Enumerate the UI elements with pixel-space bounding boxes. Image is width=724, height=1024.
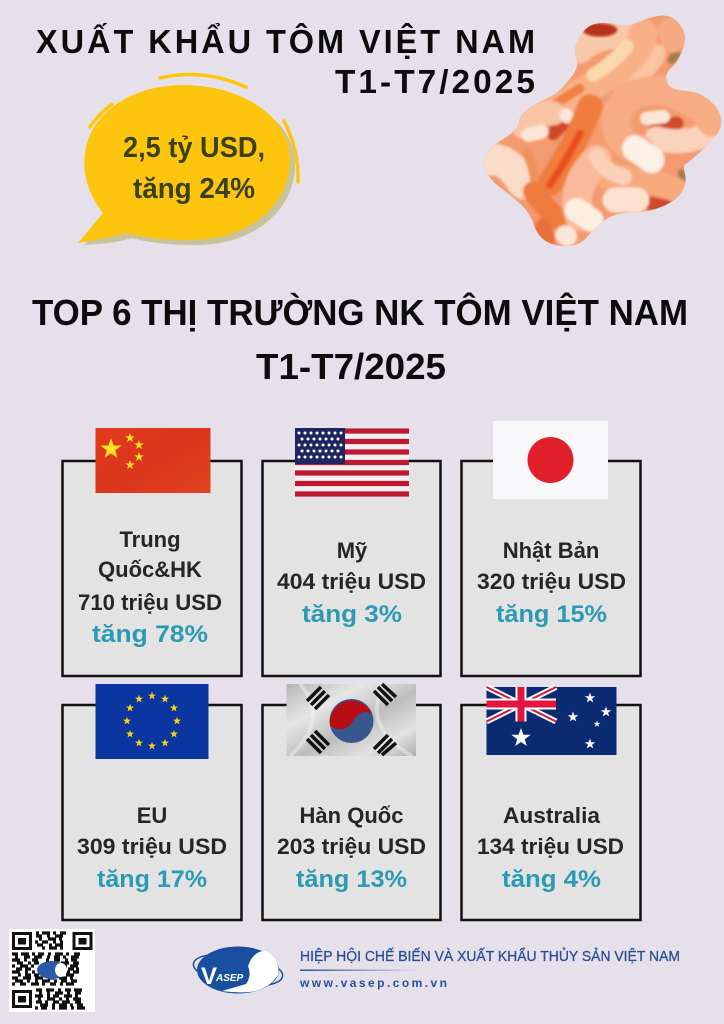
card: Australia: Australia: [503, 803, 601, 828]
card: Australia: [462, 687, 640, 920]
card: China & HK: [62, 428, 242, 676]
card: EU: [62, 684, 242, 920]
card: USA: [262, 428, 440, 676]
card: China & HK: tăng 78%: [92, 621, 208, 648]
VASEP logo: [191, 946, 285, 994]
card: China & HK: Quốc&HK: [98, 557, 202, 582]
card: Australia: tăng 4%: [502, 866, 601, 893]
card: Japan: tăng 15%: [496, 601, 607, 628]
association name: HIỆP HỘI CHẾ BIẾN VÀ XUẤT KHẨU THỦY SẢN VIỆT NAM: [300, 947, 680, 965]
card: South Korea: tăng 13%: [296, 866, 407, 893]
bubble shadow: [84, 90, 295, 245]
card: China & HK: 710 triệu USD: [78, 590, 222, 615]
card: USA: tăng 3%: [302, 601, 402, 628]
card: South Korea: 203 triệu USD: [277, 834, 426, 859]
card: Japan: 320 triệu USD: [477, 569, 626, 594]
card: USA: 404 triệu USD: [277, 569, 426, 594]
card: EU: EU: [137, 803, 167, 828]
card: Japan: Nhật Bản: [503, 538, 599, 563]
card: Australia: 134 triệu USD: [477, 834, 624, 859]
flag: USA: [295, 428, 409, 496]
title: T1-T7/2025: [335, 63, 538, 100]
flag: Australia: [486, 687, 616, 755]
heading: top 6 markets: T1-T7/2025: [256, 346, 446, 387]
card: South Korea: Hàn Quốc: [300, 803, 403, 828]
heading: top 6 markets: [32, 291, 688, 387]
card: EU: tăng 17%: [97, 866, 207, 893]
decorative arcs: [90, 75, 298, 182]
bubble text: 2,5 tỷ USD,: [123, 132, 265, 164]
flag: Japan: [493, 421, 608, 499]
flag: South Korea: [286, 684, 416, 756]
image: shrimp blob: [480, 10, 724, 250]
QR code: [9, 929, 95, 1012]
title: [36, 22, 538, 100]
flag: China: [96, 428, 210, 493]
card: Japan: [462, 421, 640, 676]
speech bubble: total: [78, 75, 298, 245]
card: South Korea: [262, 684, 440, 920]
heading: top 6 markets: TOP 6 THỊ TRƯỜNG NK TÔM VIỆT NAM: [32, 291, 688, 333]
bubble body: [78, 85, 290, 243]
VASEP logo: V: [201, 963, 217, 990]
card: EU: 309 triệu USD: [77, 834, 227, 859]
VASEP logo: ASEP: [215, 973, 244, 984]
card: China & HK: Trung: [119, 527, 181, 552]
card: USA: Mỹ: [337, 538, 368, 563]
website: www.vasep.com.vn: [299, 976, 447, 990]
flag: EU: [96, 684, 208, 759]
title: XUẤT KHẨU TÔM VIỆT NAM: [36, 22, 538, 60]
speech bubble: total: tăng 24%: [133, 173, 255, 205]
